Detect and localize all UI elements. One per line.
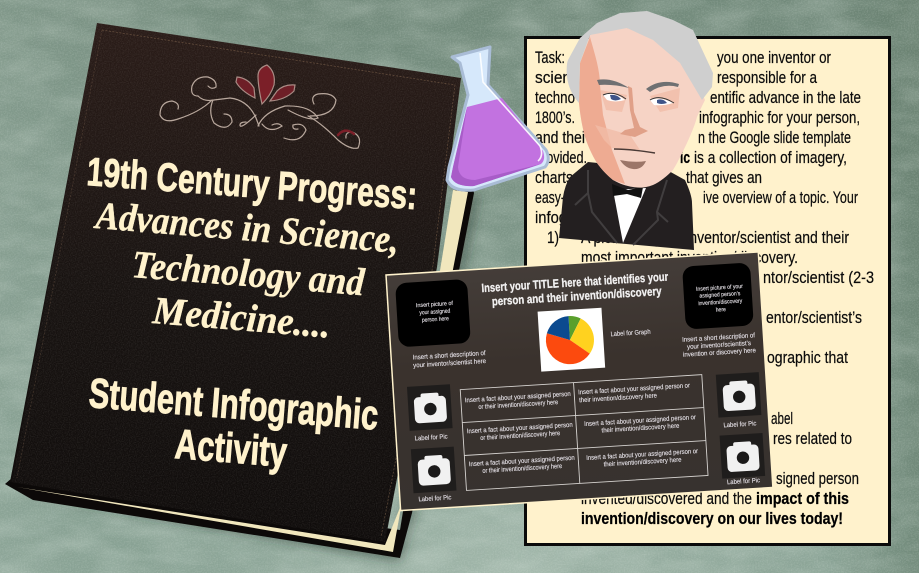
book title: Technology and: Technology and: [130, 243, 366, 304]
fact table: [460, 375, 708, 490]
panel: task instructions: is a collection of imagery,: [694, 148, 847, 167]
panel: task instructions: easy-: [535, 188, 565, 207]
description: invention: [682, 332, 756, 359]
fact table: their invention/discovery here: [603, 457, 682, 468]
picture placeholder: person: your assigned: [419, 309, 451, 316]
panel: task instructions: provided.: [535, 148, 587, 167]
panel: task instructions: impact of this: [756, 489, 849, 508]
picture placeholder: invention: [682, 262, 754, 330]
description: invention: invention or discovery here: [683, 347, 756, 359]
panel: infographic slide template: [386, 252, 773, 511]
picture placeholder: person: Insert picture of: [416, 301, 453, 309]
eyes: [603, 94, 673, 105]
panel: task instructions: infographic for your person,: [699, 108, 860, 127]
fact table: Insert a fact about your assigned person: [467, 422, 573, 435]
panel: task instructions: you one inventor or: [717, 48, 831, 67]
panel: task instructions: ive overview of a topic. Your: [703, 188, 858, 207]
panel: task instructions: charts: [535, 168, 573, 187]
panel: task instructions: ic: [680, 148, 690, 167]
panel: task instructions: signed person: [776, 469, 859, 488]
panel: task instructions: that gives an: [686, 168, 762, 187]
label for pic top left: Label for Pic: [414, 433, 448, 443]
panel: task instructions: entific advance in the late: [710, 88, 861, 107]
fact table: their invention/discovery here: [601, 423, 680, 434]
hair: [567, 11, 713, 103]
jacket: [559, 162, 694, 250]
cover ornament: [160, 65, 360, 148]
label for graph: Label for Graph: [610, 329, 651, 338]
book title: Medicine: Medicine....: [150, 289, 332, 347]
panel: task instructions: ntor/scientist (2-3: [763, 268, 874, 287]
mouth and chin: [614, 149, 655, 153]
label for pic bottom right: Label for Pic: [727, 477, 761, 486]
icon: camera top right: [716, 372, 761, 418]
picture placeholder: invention: assigned person’s: [699, 291, 741, 300]
panel: task instructions: scien: [535, 68, 571, 87]
panel: task instructions: 1): [547, 228, 559, 247]
description: inventor: your inventor/scientist here: [413, 358, 487, 369]
fact table: Insert a fact about your assigned person or: [578, 382, 691, 396]
fact table: or their invention/discovery here: [480, 430, 561, 442]
panel: task instructions: invention/discovery on our lives today!: [581, 509, 843, 528]
panel: task instructions: [526, 38, 890, 544]
book title: Activity: Activity: [173, 420, 289, 476]
panel: task instructions: Task:: [535, 48, 565, 67]
book: [0, 15, 478, 560]
pie chart: [538, 308, 605, 372]
book title: 19th Century Progress: 19th Century Progress:: [85, 150, 419, 218]
panel: task instructions: 1800’s.: [535, 108, 575, 127]
fact table: Insert a fact about your assigned person or: [586, 448, 699, 462]
slide title: person and their invention/discovery: [491, 284, 662, 308]
face shading: [595, 88, 680, 150]
slide title: Insert your TITLE here that identifies your: [481, 270, 669, 295]
description: invention: your inventor/scientist’s: [687, 340, 752, 351]
description: inventor: Insert a short description of: [412, 350, 486, 361]
fact table: their invention/discovery here: [579, 392, 658, 404]
label for pic bottom left: Label for Pic: [418, 494, 452, 503]
icon: camera bottom left: [411, 447, 456, 493]
panel: task instructions: infog: [535, 208, 567, 227]
panel: task instructions: res related to: [773, 429, 852, 448]
picture placeholder: invention: here: [716, 307, 726, 314]
label for pic top right: Label for Pic: [723, 420, 757, 429]
panel: task instructions: techno: [535, 88, 575, 107]
panel: task instructions: responsible for a: [717, 68, 817, 87]
book pages: [17, 190, 468, 552]
panel: task instructions: most important invention/discovery.: [581, 248, 798, 267]
eyebrows: [597, 79, 679, 92]
illustration: Thomas Edison portrait: [559, 11, 713, 250]
fact table: or their invention/discovery here: [482, 463, 563, 475]
fact table: Insert a fact about your assigned person or: [584, 414, 697, 428]
description: inventor: [412, 350, 487, 369]
panel: task instructions: n the Google slide template: [698, 128, 851, 147]
icon: camera top left: [407, 384, 453, 431]
picture placeholder: person: [395, 279, 471, 347]
picture placeholder: person: person here: [422, 316, 449, 324]
book cover: [0, 15, 470, 550]
panel: task instructions: and thei: [535, 128, 585, 147]
panel: task instructions: entor/scientist’s: [766, 308, 862, 327]
icon: camera bottom right: [720, 433, 765, 479]
panel: task instructions: abel: [771, 409, 793, 428]
panel: task instructions: invented/discovered and the: [581, 489, 752, 508]
description: invention: Insert a short description of: [682, 332, 755, 344]
icon: chemistry flask: [447, 47, 548, 190]
fact table: Insert a fact about your assigned person: [469, 455, 575, 468]
book title: Student Infographic: Student Infographic: [87, 369, 380, 439]
slide title: [481, 270, 670, 309]
picture placeholder: invention: invention/discovery: [698, 298, 743, 307]
book title: Advances in Science: Advances in Science,: [92, 194, 401, 262]
fact table: or their invention/discovery here: [478, 399, 559, 411]
picture placeholder: invention: Insert picture of your: [696, 284, 743, 293]
panel: task instructions: A picture of your inventor/scientist and their: [581, 228, 849, 247]
fact table: Insert a fact about your assigned person: [465, 391, 571, 404]
face: [579, 28, 705, 188]
panel: task instructions: ographic that: [767, 348, 848, 367]
